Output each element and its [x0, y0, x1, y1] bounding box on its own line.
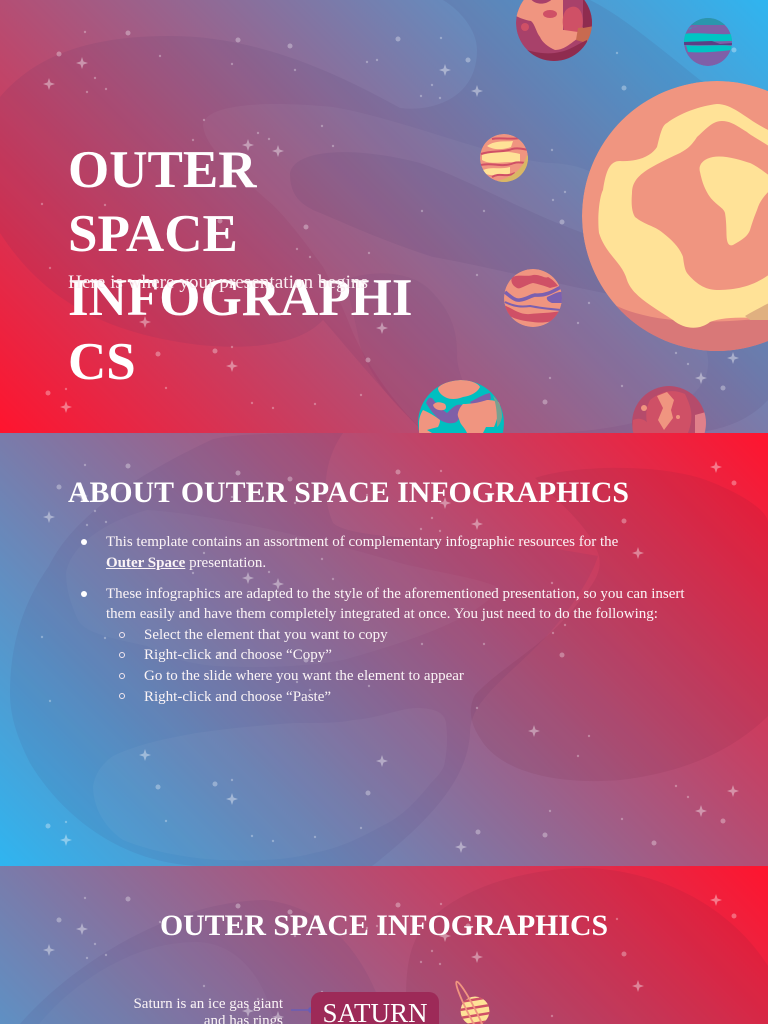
bullet one: This template contains an assortment of complementary infographic resources for the	[106, 534, 618, 550]
sub steps: Right-click and choose “Copy”	[144, 647, 332, 663]
infographic slide background artwork	[20, 868, 768, 1024]
bullet two	[81, 586, 685, 622]
about slide background artwork	[10, 433, 768, 866]
title: CS	[68, 333, 136, 391]
title	[68, 141, 412, 391]
bullet list	[81, 534, 685, 705]
icon: small planet salmon and purple	[504, 269, 563, 327]
sub steps: Select the element that you want to copy	[144, 627, 388, 643]
title: SPACE	[68, 205, 238, 263]
icon: saturn planet	[455, 980, 490, 1024]
title slide background artwork	[0, 0, 768, 433]
sub steps: Go to the slide where you want the element to appear	[144, 668, 464, 684]
sub steps: Right-click and choose “Paste”	[144, 689, 331, 705]
title: INFOGRAPHI	[68, 269, 412, 327]
icon: large planet	[582, 81, 768, 360]
icon: planet teal continents	[418, 380, 504, 433]
bullet one	[81, 534, 618, 571]
panel: infographic slide	[0, 866, 768, 1024]
icon: small planet maroon	[516, 0, 594, 64]
connector	[291, 1007, 311, 1013]
starfield	[41, 28, 739, 420]
sub steps	[119, 627, 464, 705]
panel: title slide	[0, 0, 768, 433]
heading: OUTER SPACE INFOGRAPHICS	[160, 909, 608, 942]
panel: about slide	[0, 433, 768, 866]
bullet two: These infographics are adapted to the style of the aforementioned presentation, so you can insert	[106, 586, 685, 602]
title: OUTER	[68, 141, 256, 199]
starfield	[41, 461, 739, 853]
saturn label	[311, 992, 439, 1024]
icon: small planet teal and purple	[684, 18, 732, 66]
subtitle: Here is where your presentation begins	[68, 272, 368, 293]
icon: planet red swirl	[632, 386, 706, 433]
bullet one: Outer Space presentation.	[106, 555, 266, 571]
heading: ABOUT OUTER SPACE INFOGRAPHICS	[68, 476, 629, 509]
bullet two: them easily and have them completely integrated at once. You just need to do the following:	[106, 606, 658, 622]
icon: small planet striped yellow	[480, 134, 528, 182]
saturn description: Saturn is an ice gas giant	[133, 996, 283, 1012]
saturn description	[133, 996, 283, 1024]
starfield	[41, 894, 739, 1024]
